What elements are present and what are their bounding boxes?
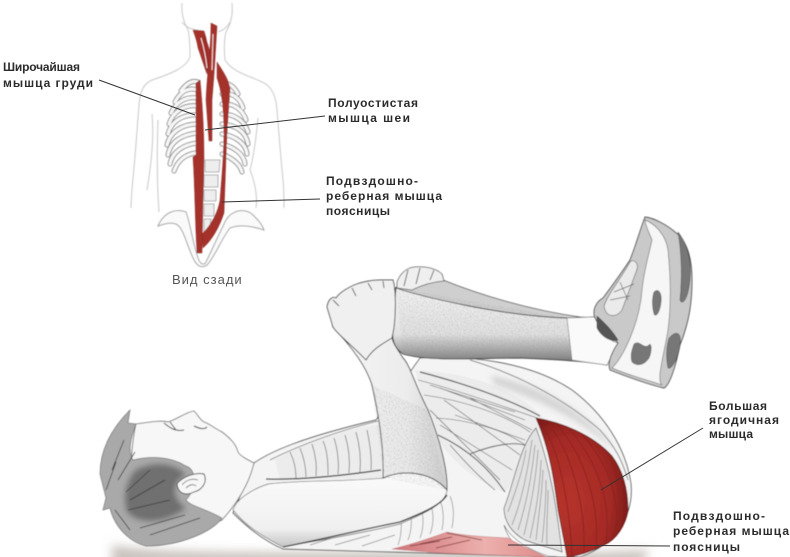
floor shadow <box>112 545 650 557</box>
pencil grain on forearm <box>372 385 447 490</box>
red gluteus muscle <box>536 418 628 557</box>
armpit dark line <box>283 495 447 547</box>
label: iliocostalis, back view <box>326 174 442 218</box>
thigh muscle fibres base <box>415 370 545 492</box>
red back muscles <box>193 23 230 253</box>
body outline <box>131 3 284 212</box>
label: latissimus: Широчайшая <box>3 60 80 74</box>
label: iliocostalis, back view: реберная мышца <box>326 189 442 203</box>
leader lines: main figure <box>508 428 703 546</box>
shoe <box>594 217 692 388</box>
label: iliocostalis, main figure <box>673 509 789 554</box>
head and neck <box>131 411 254 540</box>
forearm <box>333 327 447 490</box>
label: gluteus maximus: Большая <box>709 399 767 413</box>
label: iliocostalis, main figure: поясницы <box>673 540 740 554</box>
label: latissimus: мышца груди <box>3 76 93 90</box>
hip fibres <box>504 428 562 552</box>
hand clasping the shin <box>327 267 444 360</box>
ribs left <box>167 81 198 171</box>
label: latissimus <box>3 60 93 90</box>
thigh muscle lines <box>418 360 628 492</box>
label: gluteus maximus: мышца <box>709 427 753 441</box>
pencil grain on shin <box>396 288 572 360</box>
shin and calf <box>392 279 618 365</box>
torso and thigh silhouette <box>233 357 631 557</box>
pink lumbar muscle <box>392 532 547 557</box>
hip white band <box>504 525 560 557</box>
back view figure <box>131 3 284 267</box>
leader lines: back view <box>99 80 325 202</box>
caption: rear view: Вид сзади <box>172 272 243 287</box>
label: iliocostalis, back view: поясницы <box>326 204 390 218</box>
ribs right core <box>222 83 248 172</box>
label: semispinalis <box>328 96 418 125</box>
ribs left core <box>167 81 198 171</box>
upper arm <box>233 473 447 547</box>
chest ribs <box>266 421 382 480</box>
hair <box>100 410 222 546</box>
spine <box>204 160 220 234</box>
label: iliocostalis, main figure: Подвздошно- <box>673 509 765 523</box>
thigh back shading <box>490 375 615 450</box>
ribs right <box>222 83 248 172</box>
label: gluteus maximus <box>709 399 779 441</box>
label: semispinalis: мышца шеи <box>328 111 410 125</box>
label: iliocostalis, back view: Подвздошно- <box>326 174 418 188</box>
red muscle highlights <box>201 34 213 70</box>
label: semispinalis: Полуостистая <box>328 96 418 110</box>
label: iliocostalis, main figure: реберная мышца <box>673 524 789 538</box>
ear <box>177 474 205 494</box>
main figure lying on back <box>100 217 692 557</box>
label: gluteus maximus: ягодичная <box>709 413 779 427</box>
lower ribs <box>310 496 453 546</box>
pelvis <box>158 211 264 267</box>
